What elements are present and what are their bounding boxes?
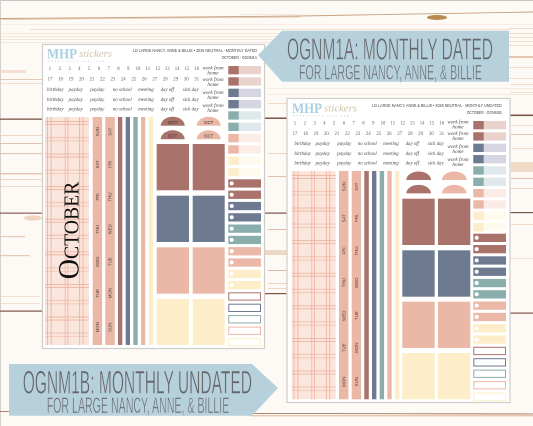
date numbers: 22 bbox=[345, 132, 350, 137]
date numbers: 31 bbox=[439, 132, 445, 137]
date numbers: 8 bbox=[362, 122, 365, 127]
date numbers: 26 bbox=[142, 78, 147, 82]
event word stickers: no school bbox=[113, 98, 132, 103]
OCT dome stickers: OCT bbox=[168, 133, 178, 138]
weekday strips: THU bbox=[108, 192, 113, 202]
logo: MHP stickers: MHP bbox=[47, 46, 77, 62]
date numbers: 5 bbox=[88, 67, 91, 72]
event word stickers: no school bbox=[358, 162, 377, 167]
event word stickers: sick day bbox=[183, 88, 199, 93]
event word stickers: day off bbox=[161, 98, 175, 103]
date numbers: 7 bbox=[107, 67, 110, 72]
logo: MHP stickers: stickers bbox=[79, 49, 112, 60]
sheet title: OCTOBER - OGNM1A bbox=[222, 55, 258, 60]
date numbers: 19 bbox=[69, 78, 74, 82]
banner: OGNM1A monthly dated bbox=[258, 31, 509, 84]
sheet title: LD LARGE NANCY, ANNE & BILLIE • 2026 NEUTRAL - MONTHLY UNDATED bbox=[372, 103, 502, 108]
weekday strips: TUE bbox=[95, 289, 100, 298]
date numbers: 31 bbox=[194, 78, 200, 82]
event word stickers: no school bbox=[113, 108, 132, 113]
date numbers: 3 bbox=[68, 67, 71, 72]
event word stickers: payday bbox=[336, 152, 352, 157]
weekday strips: SUN bbox=[354, 377, 359, 386]
date numbers: 30 bbox=[429, 132, 434, 137]
sheet title bbox=[133, 48, 258, 60]
banner: OGNM1B monthly undated: OGNM1B: MONTHLY UNDATED bbox=[23, 364, 252, 400]
event word stickers bbox=[294, 142, 444, 167]
date numbers: 28 bbox=[408, 132, 413, 137]
event word stickers: sick day bbox=[428, 162, 444, 167]
weekday strips: FRI bbox=[341, 247, 346, 255]
logo: MHP stickers bbox=[47, 46, 112, 63]
weekday strips bbox=[93, 117, 115, 345]
date numbers: 15 bbox=[430, 122, 435, 127]
date numbers: 16 bbox=[439, 122, 445, 127]
banner: OGNM1B monthly undated bbox=[9, 364, 278, 418]
colour stripes bbox=[364, 171, 399, 399]
event word stickers: payday bbox=[315, 162, 331, 167]
weekday strips: WED bbox=[95, 257, 100, 267]
date numbers: 25 bbox=[376, 132, 382, 137]
weekday strips: SUN bbox=[95, 127, 100, 136]
work from home stickers: home bbox=[452, 162, 464, 168]
work from home stickers: home bbox=[207, 95, 219, 101]
event word stickers: meeting bbox=[138, 98, 154, 103]
blank dome stickers bbox=[406, 171, 467, 193]
event word stickers: payday bbox=[89, 108, 105, 113]
date numbers: 29 bbox=[418, 132, 424, 137]
work from home stickers: home bbox=[452, 136, 464, 142]
weekday strips: TUE bbox=[341, 343, 346, 352]
date numbers: 14 bbox=[175, 67, 180, 72]
date numbers bbox=[48, 67, 200, 82]
event word stickers: birthday bbox=[47, 88, 64, 93]
event word stickers bbox=[47, 88, 199, 113]
date numbers: 18 bbox=[303, 132, 308, 137]
logo: MHP stickers: stickers bbox=[324, 104, 357, 115]
date numbers: 14 bbox=[420, 122, 425, 127]
event word stickers: meeting bbox=[383, 142, 399, 147]
date numbers: 8 bbox=[117, 67, 120, 72]
event word stickers: birthday bbox=[47, 98, 64, 103]
large colour blocks bbox=[402, 199, 470, 399]
date numbers: 23 bbox=[111, 78, 116, 82]
date numbers bbox=[293, 122, 445, 137]
event word stickers: sick day bbox=[428, 142, 444, 147]
OCT dome stickers: OCT bbox=[168, 120, 178, 125]
date numbers: 18 bbox=[58, 78, 64, 82]
event word stickers: day off bbox=[406, 162, 420, 167]
date numbers: 7 bbox=[352, 122, 355, 127]
work from home stickers: work from bbox=[202, 102, 224, 109]
logo: MHP stickers bbox=[292, 101, 357, 118]
event word stickers: meeting bbox=[138, 108, 154, 113]
weekday strips: FRI bbox=[95, 193, 100, 201]
date numbers: 6 bbox=[98, 67, 101, 72]
date numbers: 20 bbox=[79, 78, 84, 82]
weekday strips bbox=[339, 171, 361, 399]
logo: MHP stickers: mhpstickers.etsy.com bbox=[48, 60, 104, 63]
weekday strips: THU bbox=[354, 246, 359, 256]
outlined box stickers bbox=[474, 347, 506, 400]
date numbers: 12 bbox=[155, 67, 161, 72]
event word stickers: payday bbox=[68, 108, 84, 113]
weekday strips: MON bbox=[354, 343, 359, 353]
sheet title: OCTOBER - OGNM1B bbox=[467, 110, 502, 115]
banner: OGNM1B monthly undated: FOR LARGE NANCY, ANNE, & BILLIE bbox=[47, 393, 229, 418]
date numbers: 3 bbox=[313, 122, 316, 127]
work from home stickers: work from bbox=[447, 118, 469, 126]
date numbers: 10 bbox=[381, 122, 386, 127]
event word stickers: birthday bbox=[294, 152, 312, 157]
work from home stickers: work from bbox=[447, 156, 469, 163]
work from home stickers: work from bbox=[202, 76, 224, 83]
event word stickers: day off bbox=[161, 108, 175, 113]
event word stickers: meeting bbox=[383, 162, 399, 167]
date numbers: 11 bbox=[145, 67, 151, 72]
event word stickers: meeting bbox=[138, 88, 154, 93]
weekday strips: SAT bbox=[354, 182, 359, 191]
date numbers: 27 bbox=[397, 132, 403, 137]
weekday strips: MON bbox=[108, 288, 113, 298]
work from home stickers: work from bbox=[447, 143, 469, 150]
weekday strips: WED bbox=[108, 224, 113, 234]
date numbers: 20 bbox=[324, 132, 329, 137]
OCT dome stickers: OCT bbox=[204, 120, 214, 125]
event word stickers: sick day bbox=[183, 108, 199, 113]
date numbers: 26 bbox=[387, 132, 392, 137]
date numbers: 4 bbox=[323, 122, 326, 127]
weekday strips: SAT bbox=[108, 127, 113, 136]
event word stickers: payday bbox=[336, 142, 352, 147]
OCT dome stickers bbox=[161, 117, 221, 139]
work from home stickers: work from bbox=[202, 64, 224, 72]
large colour blocks bbox=[157, 144, 225, 345]
event word stickers: meeting bbox=[383, 152, 399, 157]
weekday strips: MON bbox=[341, 377, 346, 387]
date numbers: 30 bbox=[184, 78, 189, 82]
weekday strips: SUN bbox=[341, 182, 346, 191]
logo: MHP stickers: mhpstickers.etsy.com bbox=[293, 115, 349, 118]
plaid October panel: OCTOBER bbox=[52, 182, 85, 279]
event word stickers: payday bbox=[315, 152, 331, 157]
date numbers: 11 bbox=[390, 122, 396, 127]
date numbers: 10 bbox=[136, 67, 141, 72]
event word stickers: day off bbox=[406, 152, 420, 157]
date numbers: 19 bbox=[314, 132, 319, 137]
weekday strips: THU bbox=[341, 278, 346, 287]
event word stickers: birthday bbox=[294, 142, 312, 147]
date numbers: 24 bbox=[366, 132, 371, 137]
date numbers: 28 bbox=[163, 78, 168, 82]
plaid panel bbox=[292, 171, 336, 399]
work from home stickers bbox=[202, 64, 224, 114]
date numbers: 25 bbox=[131, 78, 137, 82]
date numbers: 6 bbox=[343, 122, 346, 127]
work from home stickers: work from bbox=[447, 130, 469, 137]
date numbers: 17 bbox=[293, 132, 298, 137]
date numbers: 16 bbox=[194, 67, 200, 72]
work from home stickers: home bbox=[452, 149, 464, 155]
weekday strips: TUE bbox=[108, 257, 113, 266]
work from home stickers: home bbox=[207, 71, 219, 77]
date numbers: 1 bbox=[49, 67, 52, 72]
weekday strips: FRI bbox=[108, 161, 113, 168]
weekday strips: THU bbox=[95, 225, 100, 234]
date numbers: 27 bbox=[152, 78, 158, 82]
event word stickers: day off bbox=[161, 88, 175, 93]
work from home stickers: home bbox=[207, 108, 219, 114]
event word stickers: birthday bbox=[294, 162, 312, 167]
date numbers: 12 bbox=[400, 122, 406, 127]
date numbers: 1 bbox=[294, 122, 297, 127]
tab stickers with dots bbox=[228, 179, 261, 289]
event word stickers: day off bbox=[406, 142, 420, 147]
date numbers: 13 bbox=[410, 122, 415, 127]
sheet title: LD LARGE NANCY, ANNE & BILLIE • 2026 NEUTRAL - MONTHLY DATED bbox=[133, 48, 258, 53]
date numbers: 21 bbox=[90, 78, 95, 82]
panel: dated sticker sheet bbox=[42, 44, 264, 348]
work from home stickers: work from bbox=[202, 89, 224, 96]
event word stickers: no school bbox=[113, 88, 132, 93]
weekday strips: FRI bbox=[354, 215, 359, 222]
event word stickers: payday bbox=[68, 98, 84, 103]
event word stickers: no school bbox=[358, 152, 377, 157]
event word stickers: no school bbox=[358, 142, 377, 147]
colour stripes bbox=[118, 117, 153, 345]
two-tone label stickers bbox=[228, 66, 261, 176]
date numbers: 13 bbox=[165, 67, 170, 72]
weekday strips: WED bbox=[354, 278, 359, 288]
weekday strips: WED bbox=[341, 311, 346, 321]
event word stickers: sick day bbox=[428, 152, 444, 157]
tab stickers with dots bbox=[473, 234, 506, 344]
event word stickers: sick day bbox=[183, 98, 199, 103]
date numbers: 9 bbox=[127, 67, 130, 72]
work from home stickers: home bbox=[452, 125, 464, 131]
date numbers: 2 bbox=[59, 67, 62, 72]
date numbers: 23 bbox=[356, 132, 361, 137]
weekday strips: SAT bbox=[341, 214, 346, 222]
date numbers: 29 bbox=[173, 78, 179, 82]
event word stickers: payday bbox=[315, 142, 331, 147]
plaid October panel bbox=[45, 117, 89, 345]
date numbers: 22 bbox=[100, 78, 105, 82]
logo: MHP stickers: MHP bbox=[292, 101, 322, 117]
weekday strips: SUN bbox=[108, 323, 113, 332]
event word stickers: payday bbox=[336, 162, 352, 167]
two-tone label stickers bbox=[473, 121, 506, 231]
work from home stickers: home bbox=[207, 82, 219, 88]
date numbers: 15 bbox=[185, 67, 190, 72]
event word stickers: payday bbox=[68, 88, 84, 93]
OCT dome stickers: OCT bbox=[204, 133, 214, 138]
event word stickers: birthday bbox=[47, 108, 64, 113]
event word stickers: payday bbox=[89, 98, 105, 103]
date numbers: 24 bbox=[121, 78, 126, 82]
weekday strips: SAT bbox=[95, 160, 100, 168]
date numbers: 2 bbox=[304, 122, 307, 127]
event word stickers: payday bbox=[89, 88, 105, 93]
outlined box stickers bbox=[229, 293, 260, 346]
sheet title bbox=[372, 103, 502, 115]
weekday strips: TUE bbox=[354, 311, 359, 320]
date numbers: 9 bbox=[372, 122, 375, 127]
weekday strips: MON bbox=[95, 322, 100, 332]
panel: undated sticker sheet bbox=[287, 98, 510, 402]
date numbers: 21 bbox=[335, 132, 340, 137]
date numbers: 5 bbox=[333, 122, 336, 127]
date numbers: 17 bbox=[48, 78, 53, 82]
work from home stickers bbox=[447, 118, 469, 168]
date numbers: 4 bbox=[78, 67, 81, 72]
